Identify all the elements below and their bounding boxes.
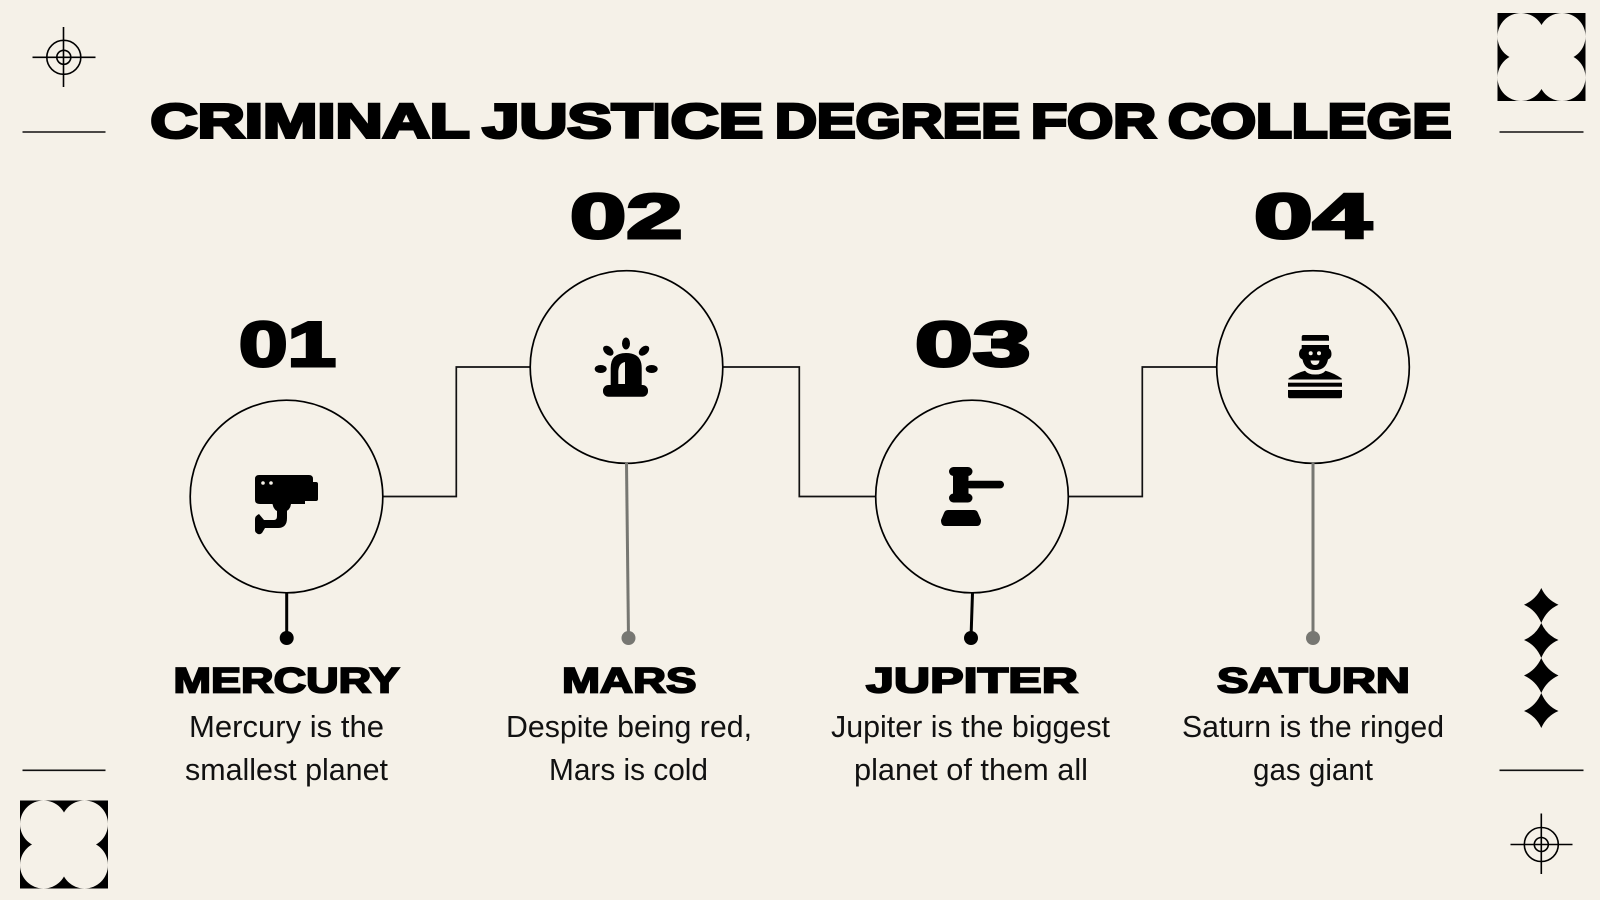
step 1: Mercury (174, 310, 400, 787)
description Mercury: Mercury is the (189, 709, 384, 744)
icon: prisoner (1288, 335, 1342, 398)
icon: crosshair top left (32, 27, 96, 87)
label Saturn: SATURN (1217, 662, 1410, 700)
description Jupiter: Jupiter is the biggest (831, 709, 1110, 744)
description Saturn: Saturn is the ringed (1182, 709, 1444, 744)
label Jupiter: JUPITER (866, 662, 1078, 700)
stem and dot (622, 463, 636, 645)
icon: column of four sparkles (1524, 588, 1558, 728)
icon: crosshair bottom right (1510, 814, 1572, 874)
label Mercury: MERCURY (174, 662, 400, 700)
circle 2 (530, 271, 723, 463)
number 02: 02 (570, 182, 682, 252)
stem and dot (280, 593, 294, 645)
description Mars: Despite being red, (506, 709, 752, 744)
stem and dot (964, 593, 978, 645)
icon: alarm siren (595, 338, 658, 397)
circle 1 (190, 400, 383, 593)
connector lines between circles (382, 367, 1216, 496)
icon: quatrefoil bottom left (20, 800, 108, 888)
description Mercury: smallest planet (185, 752, 388, 787)
circle 3 (876, 400, 1068, 593)
step 3: Jupiter (831, 310, 1110, 787)
description Jupiter: planet of them all (854, 752, 1088, 787)
circle 4 (1217, 271, 1409, 463)
number 04: 04 (1254, 182, 1372, 252)
number 01: 01 (239, 310, 336, 380)
icon: gavel (941, 467, 1004, 526)
step 4: Saturn (1182, 182, 1444, 787)
description Mars: Mars is cold (549, 752, 708, 787)
title: DEGREE (775, 96, 1020, 148)
title: FOR (1031, 96, 1156, 148)
label Mars: MARS (562, 662, 696, 700)
number 03: 03 (915, 310, 1030, 380)
title: COLLEGE (1168, 96, 1452, 148)
icon: quatrefoil top right (1498, 13, 1586, 101)
title: CRIMINAL (150, 96, 468, 148)
icon: security camera (255, 475, 318, 534)
step 2: Mars (506, 182, 752, 787)
title: JUSTICE (482, 96, 763, 148)
description Saturn: gas giant (1253, 752, 1373, 787)
stem and dot (1306, 463, 1320, 645)
